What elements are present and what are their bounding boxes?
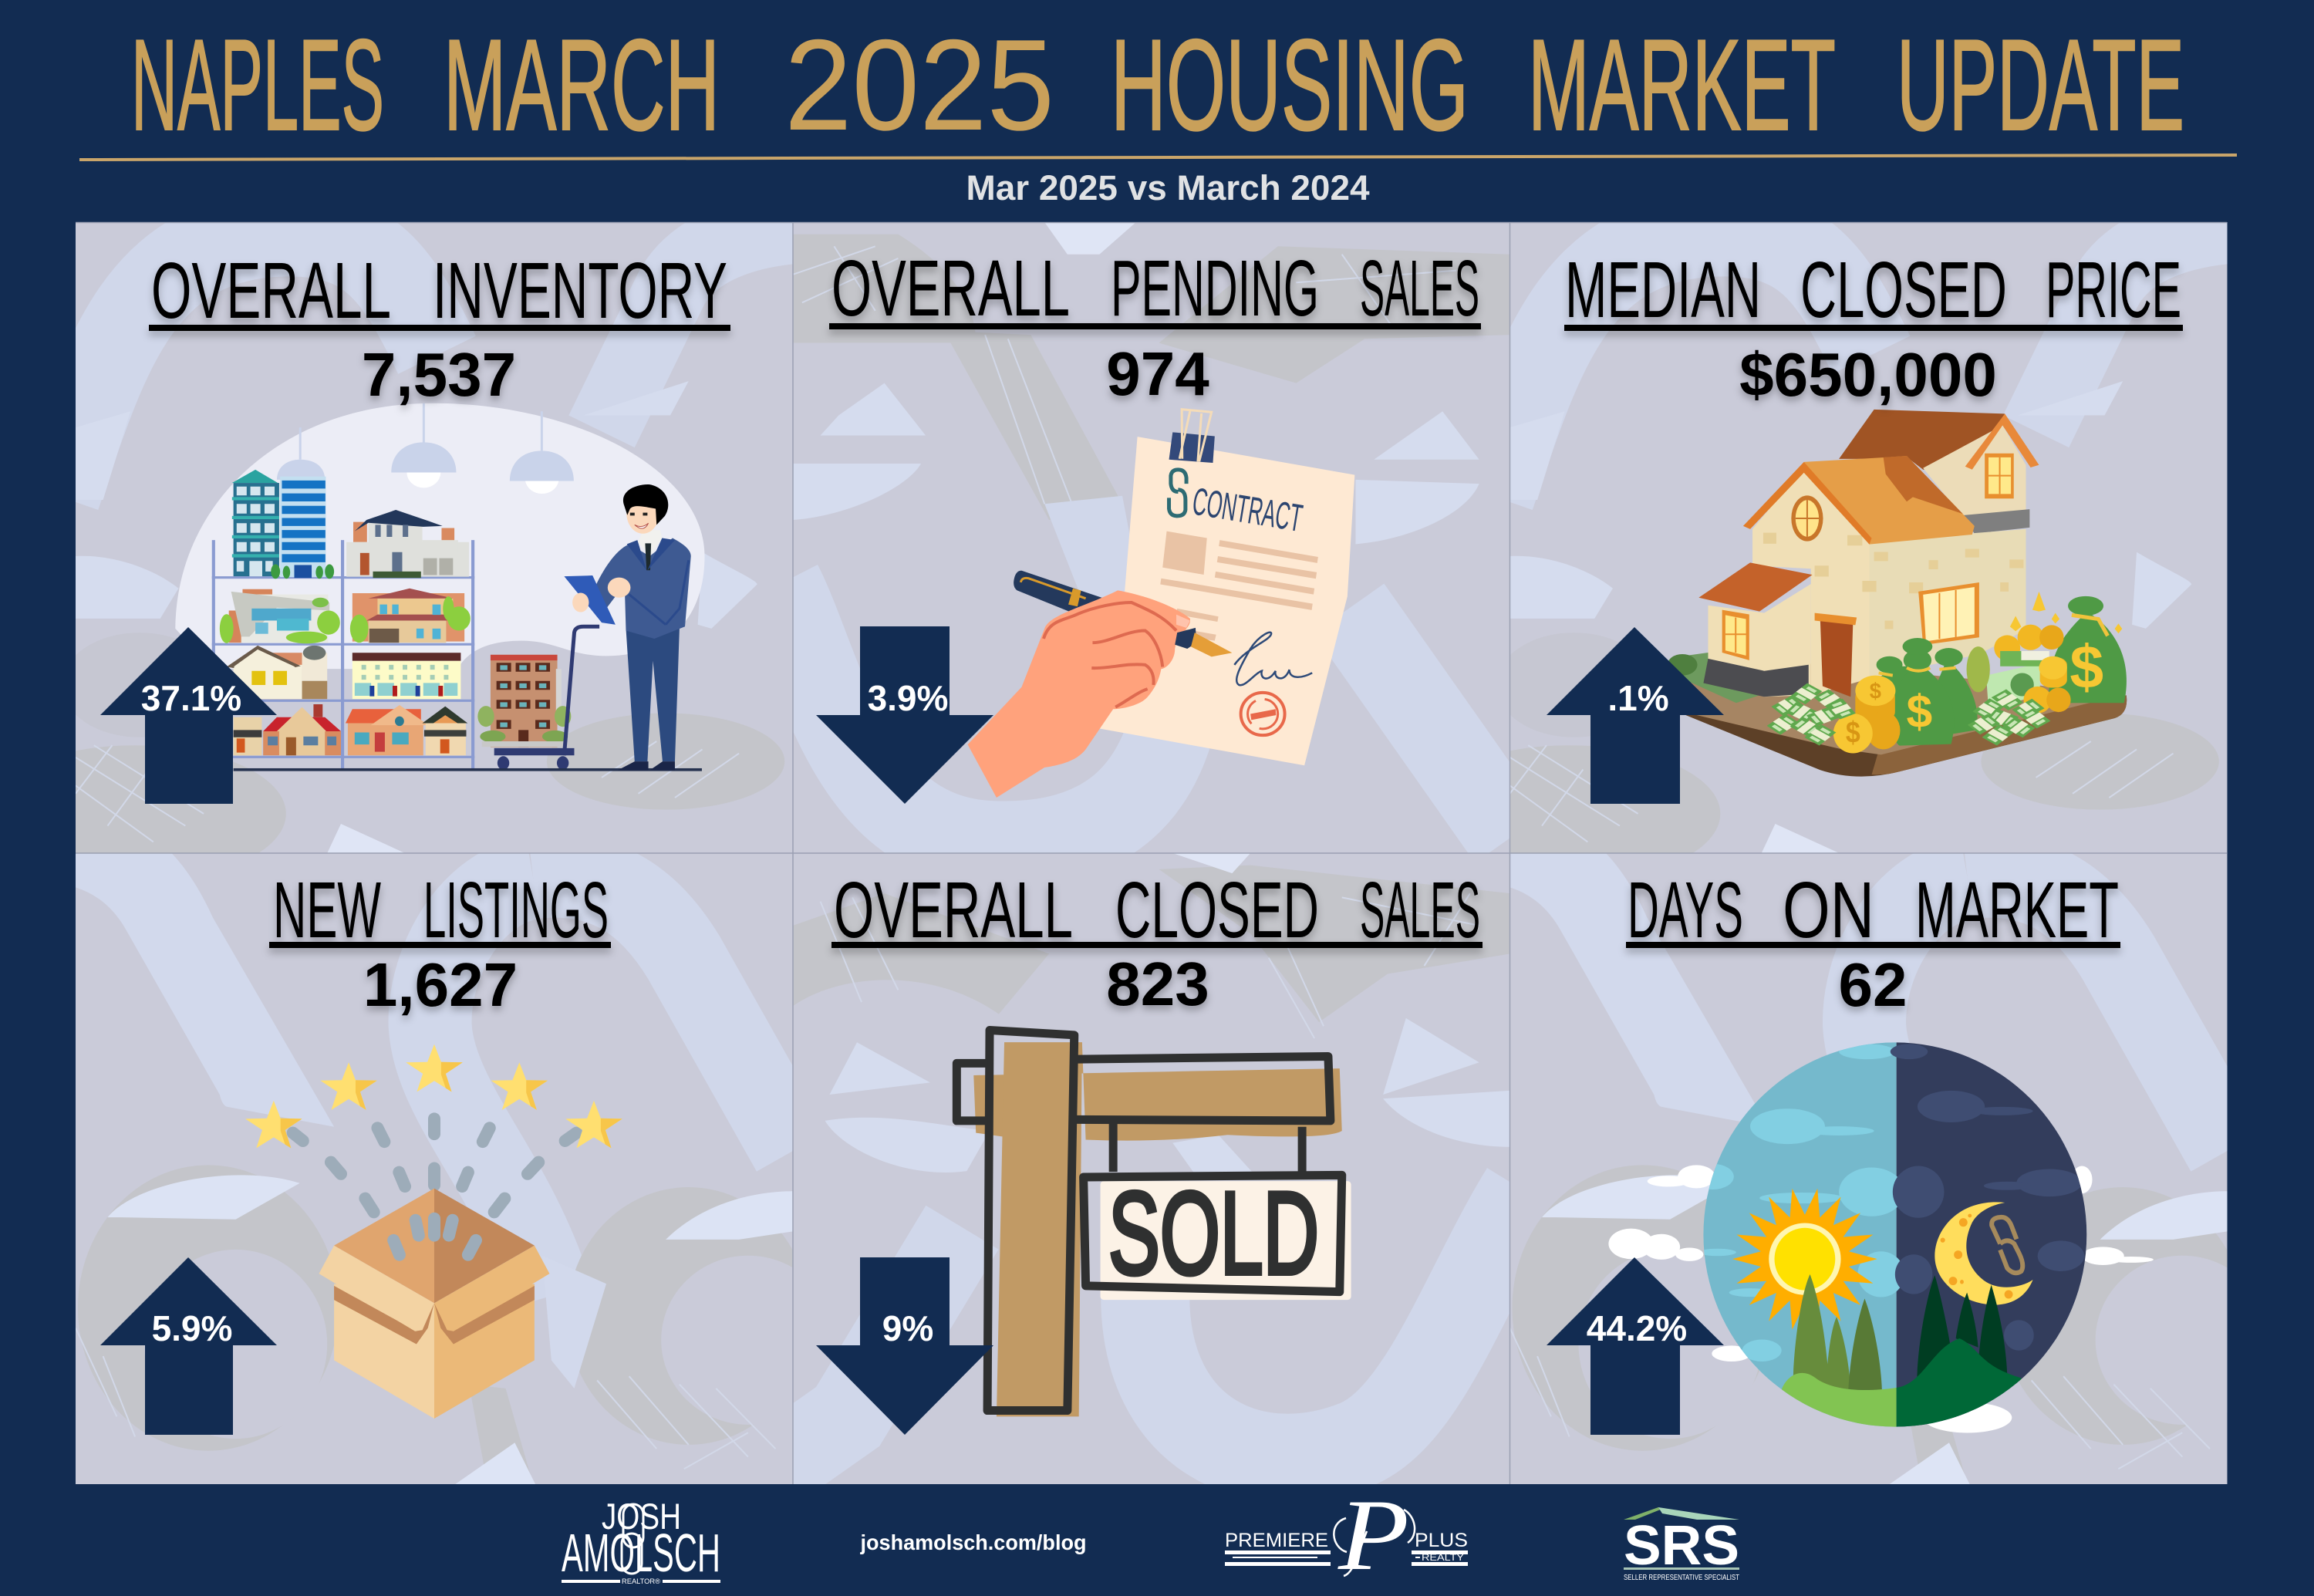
sold lettering: SOLD [1108, 1168, 1319, 1299]
number: 974 [1106, 339, 1209, 408]
heading [1564, 245, 2183, 334]
arrow up: change: 44.2% [1587, 1308, 1687, 1348]
logo: Seller Representative Specialist: SRS [1624, 1515, 1739, 1577]
heading: ON [1783, 865, 1874, 954]
arrow down: change: 9% [882, 1308, 933, 1348]
number: $650,000 [1739, 340, 1997, 409]
arrow up: change: 37.1% [141, 678, 241, 718]
icon: house with money: $ [1870, 679, 1881, 703]
title: 2025 [784, 12, 1054, 157]
icon: contract being signed [968, 410, 1354, 798]
number: 7,537 [362, 340, 516, 409]
panel: overall pending sales [779, 222, 1510, 853]
heading: NEW [273, 865, 381, 954]
arrow down: change: 3.9% [868, 678, 948, 718]
logo: Premiere Plus Realty: PREMIERE [1225, 1530, 1328, 1551]
heading: CLOSED [1800, 245, 2007, 334]
panel: median closed price [1510, 222, 2228, 853]
title rule [79, 154, 2237, 161]
number: 823 [1106, 950, 1209, 1018]
heading [1626, 865, 2120, 954]
logo: Josh Amolsch [562, 1496, 720, 1585]
heading: LISTINGS [423, 865, 609, 954]
heading: OVERALL [831, 244, 1070, 332]
arrow up: change: .1% [1607, 678, 1669, 718]
subtitle: Mar 2025 vs March 2024 [966, 168, 1370, 208]
arrow up: change: 5.9% [152, 1308, 232, 1348]
arrow down: change [816, 626, 993, 804]
logo: Josh Amolsch: AMOLSCH [562, 1523, 720, 1583]
icon: open box with stars [245, 1044, 622, 1419]
panel: new listings [76, 853, 835, 1484]
arrow up: change [1547, 627, 1724, 804]
icon: house with money: $ [1846, 716, 1860, 749]
heading [269, 865, 611, 954]
logo: Premiere Plus Realty: P [1337, 1478, 1409, 1591]
panel: days on market [1510, 853, 2269, 1484]
contract label: CONTRACT [1189, 480, 1305, 540]
heading: OVERALL [151, 246, 391, 335]
heading: PRICE [2046, 245, 2181, 334]
heading: DAYS [1628, 865, 1743, 954]
heading: OVERALL [834, 865, 1073, 954]
logo: Premiere Plus Realty [1225, 1478, 1468, 1591]
panel: overall inventory [76, 223, 793, 853]
panel: overall closed sales: SALES [1360, 865, 1480, 954]
number: 1,627 [363, 950, 518, 1019]
icon: sold sign [956, 1031, 1351, 1416]
heading: PENDING [1111, 244, 1319, 332]
panel background [779, 853, 1525, 1484]
number: 62 [1839, 950, 1907, 1019]
panel background [1510, 853, 2269, 1484]
heading [829, 244, 1481, 332]
panel background [76, 853, 835, 1484]
panel: overall closed sales [779, 853, 1525, 1484]
footer link: joshamolsch.com/blog [860, 1530, 1086, 1554]
title [131, 12, 2184, 157]
title: MARKET [1528, 12, 1836, 157]
logo: Josh Amolsch: JOSH [602, 1496, 681, 1537]
icon: day and night orb [1608, 1039, 2154, 1433]
title: MARCH [444, 12, 720, 157]
icon: house with money: $ [2069, 633, 2103, 700]
logo: Seller Representative Specialist: SELLER REPRESENTATIVE SPECIALIST [1624, 1574, 1739, 1582]
heading: MEDIAN [1565, 245, 1761, 334]
icon: inventory shelves and agent [175, 403, 705, 771]
arrow up: change [100, 1257, 277, 1435]
panel: overall pending sales: SALES [1360, 244, 1479, 332]
title: HOUSING [1111, 12, 1469, 157]
arrow up: change [1547, 1257, 1724, 1435]
heading [149, 246, 730, 335]
logo: Premiere Plus Realty: PLUS [1415, 1530, 1468, 1551]
arrow up: change [100, 627, 277, 804]
heading: INVENTORY [433, 246, 727, 335]
heading [831, 865, 1483, 954]
panel background [76, 223, 793, 853]
icon: house with money: $ [1906, 685, 1932, 737]
panel background [779, 222, 1510, 853]
heading: MARKET [1915, 865, 2119, 954]
logo: Josh Amolsch: REALTOR® [622, 1577, 660, 1585]
panel background [1510, 222, 2228, 853]
logo: Premiere Plus Realty: REALTY [1422, 1552, 1464, 1563]
title: NAPLES [131, 12, 384, 157]
icon: house with money [1668, 410, 2127, 777]
arrow down: change [816, 1257, 993, 1435]
heading: CLOSED [1115, 865, 1319, 954]
